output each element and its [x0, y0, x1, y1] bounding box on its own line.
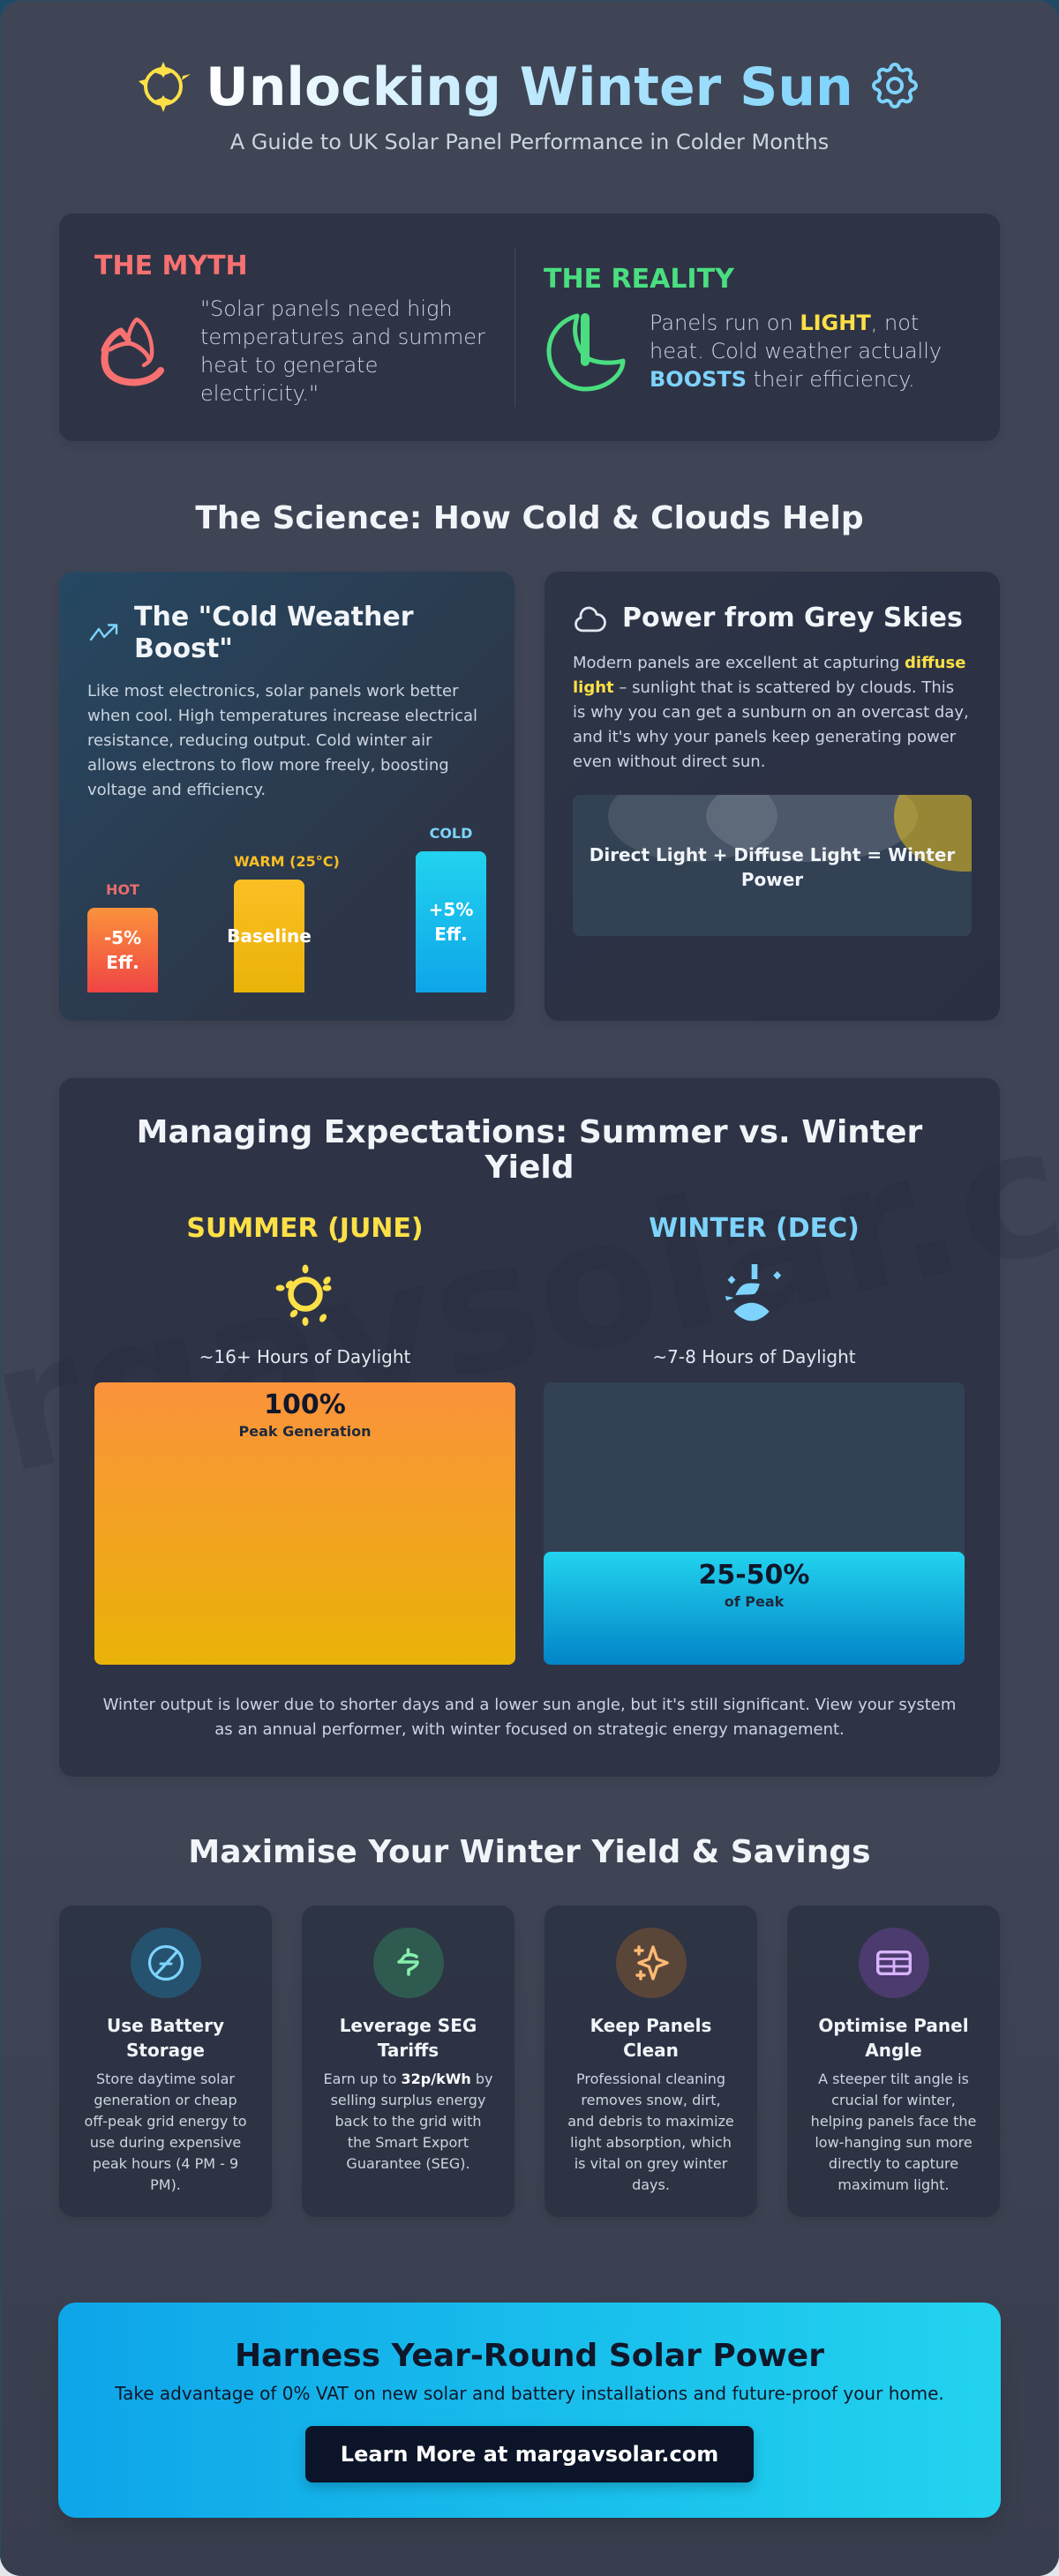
value: 100%: 100% [264, 1389, 346, 1420]
title: angle [818, 2015, 969, 2061]
text: diffuse light explanation: even without direct sun. [573, 753, 765, 771]
text: clean: Professional cleaning [576, 2071, 725, 2087]
text: winter note: as an annual performer, with winter focused on strategic energy management. [214, 1720, 845, 1739]
text: angle: maximum light. [837, 2176, 950, 2193]
heading: cold weather boost: Boost" [134, 633, 233, 664]
heading: managing expectations: Yield [485, 1149, 574, 1186]
subtitle: A Guide to UK Solar Panel Performance in Colder Months [230, 130, 829, 154]
text: call to action: Take advantage of 0% VAT on new solar and battery installations and future-proof your home. [115, 2383, 944, 2404]
panel: summer vs winter [59, 1078, 1000, 1777]
icon: winter sun [725, 1264, 782, 1322]
text: winter note: Winter output is lower due to shorter days and a lower sun angle, but it's still significant. View your system [103, 1696, 956, 1714]
text: winter daylight: ~7-8 Hours of Daylight [652, 1346, 856, 1367]
text: diffuse light explanation: is why you can get a sunburn on an overcast day, [573, 703, 969, 722]
icon: dollar [372, 1928, 443, 1998]
heading: the science: The Science: How Cold & Clouds Help [195, 500, 864, 536]
text: winter note [103, 1696, 956, 1739]
title: clean: Keep Panels [590, 2015, 711, 2036]
title: clean [590, 2015, 711, 2061]
heading: cold weather boost: The "Cold Weather [134, 602, 414, 633]
caption [590, 844, 955, 890]
cloud blob one [608, 770, 777, 862]
text: SEG: selling surplus energy [331, 2092, 485, 2108]
panel: call to action [58, 2303, 1001, 2518]
text: clean: and debris to maximize [567, 2113, 734, 2130]
heading: cold weather boost [134, 602, 414, 664]
title: SEG: Leverage SEG [340, 2015, 477, 2036]
icon: sun outline [139, 62, 191, 112]
icon: panel [858, 1928, 928, 1998]
text: cold weather explanation: Like most electronics, solar panels work better [87, 682, 459, 700]
text: angle: directly to capture [829, 2155, 958, 2172]
text: cold weather explanation [87, 682, 477, 799]
bar: hot [87, 908, 158, 992]
title: angle: Angle [865, 2040, 922, 2061]
bar: warm [234, 880, 304, 992]
text: myth quote: temperatures and summer [200, 325, 485, 349]
text: diffuse light explanation: and it's why your panels keep generating power [573, 728, 956, 746]
sun blob [894, 760, 1035, 872]
text: angle: helping panels face the [811, 2113, 976, 2130]
text: angle [811, 2071, 976, 2193]
bar: hot: Eff. [106, 952, 139, 973]
text: clean: is vital on grey winter [575, 2155, 727, 2172]
heading: the myth: THE MYTH [94, 251, 248, 281]
text: clean: light absorption, which [570, 2134, 732, 2151]
title: battery: Use Battery [107, 2015, 224, 2036]
text: summer daylight: ~16+ Hours of Daylight [199, 1346, 410, 1367]
icon: summer sun [275, 1265, 332, 1326]
heading: summer: SUMMER (JUNE) [186, 1213, 424, 1244]
card: panel angle [787, 1906, 1000, 2217]
label: of peak: of Peak [725, 1593, 784, 1610]
cloud blob two [706, 770, 918, 862]
text: reality statement: Panels run on LIGHT, not [650, 311, 919, 335]
heading: winter: WINTER (DEC) [649, 1213, 860, 1244]
panel: cold weather boost [59, 572, 514, 1021]
bar: cold: +5% [429, 899, 473, 920]
card: battery storage [59, 1906, 272, 2217]
text: diffuse light explanation [573, 654, 969, 771]
title: clean: Clean [623, 2040, 679, 2061]
icon: flame [101, 318, 164, 386]
label: peak generation: Peak Generation [238, 1423, 371, 1440]
text: cold weather explanation: voltage and efficiency. [87, 781, 266, 799]
bar: cold [416, 851, 486, 992]
bar: summer generation [94, 1382, 515, 1665]
heading: power from grey skies: Power from Grey Skies [622, 603, 963, 633]
text: cold weather explanation: allows electrons to flow more freely, boosting [87, 756, 449, 775]
bar: hot: -5% [104, 927, 141, 948]
text: myth quote: heat to generate [200, 353, 378, 378]
title: SEG [340, 2015, 477, 2061]
text: reality statement [650, 311, 942, 392]
title: Unlocking Winter Sun [206, 56, 853, 118]
text: myth quote: electricity." [200, 381, 319, 406]
text: clean: removes snow, dirt, [581, 2092, 721, 2108]
text: battery: off-peak grid energy to [84, 2113, 247, 2130]
title: SEG: Tariffs [378, 2040, 439, 2061]
panel: power from grey skies [545, 572, 1000, 1021]
text: angle: low-hanging sun more [815, 2134, 973, 2151]
icon: cloud [575, 607, 606, 632]
text: battery: use during expensive [90, 2134, 241, 2151]
label: warm: WARM (25°C) [234, 853, 340, 870]
divider [514, 248, 515, 407]
title: angle: Optimise Panel [818, 2015, 969, 2036]
text: reality statement: BOOSTS their efficiency. [650, 367, 915, 392]
icon: trending up [90, 624, 118, 640]
card: keep panels clean [545, 1906, 757, 2217]
icon: sparkles [616, 1928, 687, 1998]
panel: myth vs reality [59, 213, 1000, 441]
title: battery [107, 2015, 224, 2061]
bar: warm: Baseline [227, 925, 312, 947]
icon: sun clock [547, 313, 625, 392]
text: SEG: back to the grid with [335, 2113, 481, 2130]
text: cold weather explanation: when cool. High temperatures increase electrical [87, 707, 477, 725]
text: reality statement: heat. Cold weather actually [650, 339, 942, 363]
heading: managing expectations [137, 1114, 923, 1186]
icon: gear [872, 63, 918, 109]
text: cold weather explanation: resistance, reducing output. Cold winter air [87, 731, 432, 750]
text: battery: Store daytime solar [96, 2071, 235, 2087]
heading: maximise yield: Maximise Your Winter Yield & Savings [188, 1834, 871, 1870]
bar: winter track [544, 1382, 965, 1665]
text: myth quote: "Solar panels need high [200, 296, 453, 321]
text: diffuse light explanation: Modern panels are excellent at capturing diffuse [573, 654, 965, 672]
card: SEG tariffs [302, 1906, 514, 2217]
text: clean: days. [632, 2176, 670, 2193]
text: SEG: Earn up to 32p/kWh by [324, 2071, 492, 2087]
caption: Direct Light + Diffuse Light = Winter [590, 844, 955, 865]
text: myth quote [200, 296, 485, 406]
label: hot: HOT [106, 881, 139, 898]
text: battery: PM). [150, 2176, 181, 2193]
text: battery: peak hours (4 PM - 9 [93, 2155, 238, 2172]
bar: cold: Eff. [434, 924, 468, 945]
label: cold: COLD [430, 825, 472, 842]
button: Learn More at margavsolar.com [341, 2442, 718, 2467]
title: battery: Storage [126, 2040, 205, 2061]
text: clean [567, 2071, 734, 2193]
caption: Power [741, 869, 803, 890]
text: angle: crucial for winter, [831, 2092, 956, 2108]
button [305, 2426, 754, 2482]
text: angle: A steeper tilt angle is [818, 2071, 969, 2087]
diagram: direct plus diffuse light [573, 795, 972, 936]
text: battery: generation or cheap [94, 2092, 237, 2108]
heading: the reality: THE REALITY [544, 264, 734, 295]
icon: battery [131, 1928, 201, 1998]
heading: managing expectations: Managing Expectations: Summer vs. Winter [137, 1114, 922, 1150]
text: SEG: the Smart Export [348, 2134, 469, 2151]
text: diffuse light explanation: light – sunlight that is scattered by clouds. This [573, 678, 954, 697]
bar: winter generation [544, 1552, 965, 1665]
value: 25-50%: 25-50% [698, 1560, 810, 1591]
text: SEG [324, 2071, 492, 2172]
text: battery [84, 2071, 247, 2193]
text: SEG: Guarantee (SEG). [346, 2155, 470, 2172]
heading: call to action: Harness Year-Round Solar Power [235, 2338, 824, 2374]
